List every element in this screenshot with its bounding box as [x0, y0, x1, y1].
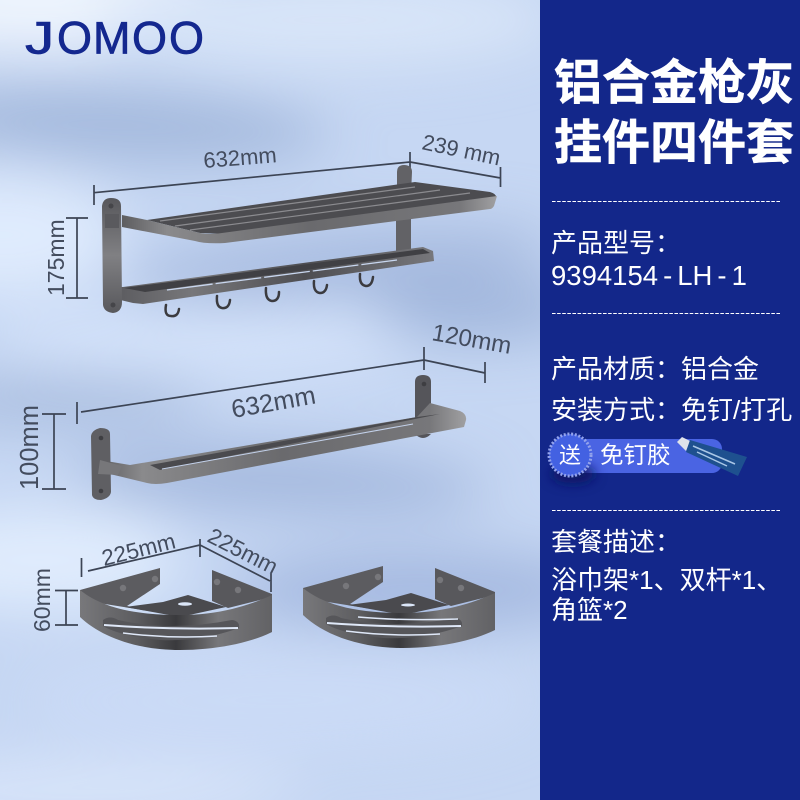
background: blue metallic left area	[0, 0, 540, 800]
product: folding towel rack with dimensions	[43, 129, 503, 316]
icon: lower rail gap	[124, 249, 430, 292]
dimension: rack height 175mm	[43, 218, 88, 298]
icon: bar gap	[150, 414, 440, 470]
icon: right bar plate	[415, 375, 431, 438]
text block: material and installation: 安装方式：免钉/打孔	[551, 395, 792, 425]
badge label: 免钉胶	[600, 442, 670, 468]
dimension: rack depth 239 mm: 239 mm	[420, 129, 503, 170]
icon: left bar plate	[91, 428, 111, 500]
icon: left wall plate	[102, 198, 122, 313]
dimension: rack length 632mm: 632mm	[202, 142, 278, 173]
dimension: bar length 632mm: 632mm	[229, 382, 318, 424]
text block: package description: 套餐描述：	[551, 527, 681, 557]
dimension: basket width 225mm right: 225mm	[204, 523, 282, 580]
badge circle	[549, 434, 591, 476]
icon: five hooks	[166, 274, 373, 316]
badge circle: 送	[559, 443, 581, 468]
dimension: bar height 100mm: 100mm	[16, 405, 44, 490]
product: corner basket with dimensions	[29, 523, 282, 650]
product: double towel bar with dimensions	[16, 319, 513, 500]
badge bar	[575, 439, 722, 473]
dimension: bar height 100mm	[16, 405, 66, 490]
logo: JOMOO: J	[25, 14, 54, 64]
dimension: basket height 60mm: 60mm	[29, 568, 55, 632]
dimension: bar depth 120mm	[424, 319, 513, 383]
dimension: rack depth 239 mm	[410, 129, 503, 187]
logo: JOMOO: OMOO	[57, 12, 204, 64]
text block: product model	[551, 228, 747, 291]
badge shadow	[551, 465, 595, 483]
dimension: basket width 225mm left	[82, 528, 200, 577]
text block: package description	[551, 527, 782, 625]
icon: rack lower rail	[112, 247, 434, 304]
icon: rack top shelf	[147, 182, 496, 234]
icon: right rear post	[396, 165, 412, 254]
text block: product model: 9394154-LH-1	[551, 260, 747, 291]
icon: plate screws	[105, 204, 119, 308]
text block: product model: 产品型号：	[551, 228, 681, 258]
callout: free glue gift badge	[549, 434, 747, 483]
text block: package description: 角篮*2	[551, 595, 628, 625]
dimension: rack height 175mm: 175mm	[43, 219, 69, 296]
icon: glue tube	[677, 437, 747, 476]
dimension: bar depth 120mm: 120mm	[430, 319, 513, 360]
heading: product title: 挂件四件套	[554, 117, 794, 170]
icon: bar plate screws	[99, 382, 426, 493]
heading: product title	[554, 57, 794, 170]
text block: material and installation: 产品材质：铝合金	[551, 354, 759, 384]
icon: right corner basket	[303, 566, 495, 648]
heading: product title: 铝合金枪灰	[554, 57, 794, 110]
icon: top shelf front edge	[122, 196, 497, 243]
icon: twin bar body	[98, 403, 466, 484]
dimension: rack length 632mm	[94, 142, 410, 205]
icon: shelf slats	[160, 187, 470, 230]
dimension: basket height 60mm	[29, 568, 78, 632]
panel: navy product information	[540, 0, 800, 800]
icon: left basket	[80, 568, 272, 650]
text block: material and installation	[551, 354, 792, 425]
dimension: basket width 225mm left: 225mm	[99, 528, 178, 571]
dimension: bar length 632mm	[77, 347, 424, 424]
text block: package description: 浴巾架*1、双杆*1、	[551, 565, 782, 595]
